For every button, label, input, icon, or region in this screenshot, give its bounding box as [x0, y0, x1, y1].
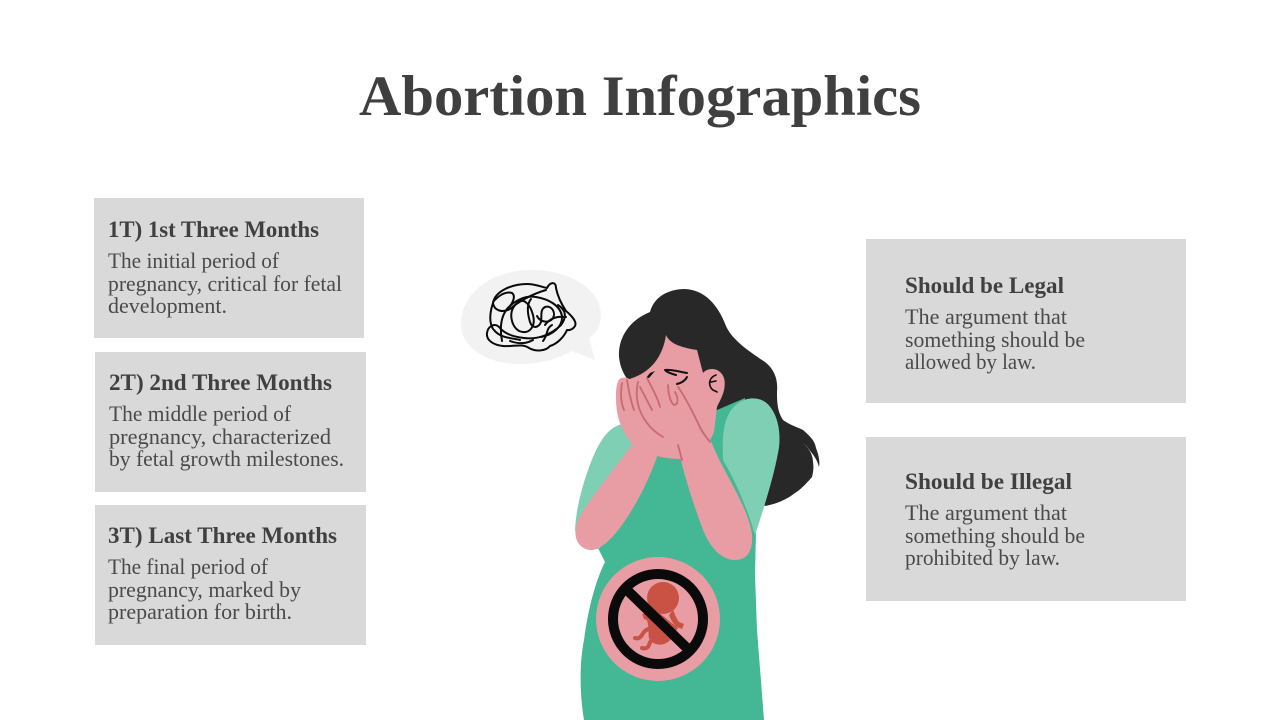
panel: should be illegal: prohibited by law.	[905, 545, 1060, 570]
closed eyes	[665, 370, 687, 384]
panel: last three months	[95, 505, 366, 645]
right sleeve	[723, 398, 780, 535]
left sleeve	[575, 424, 652, 549]
panel: should be illegal: something should be	[905, 523, 1085, 548]
panel: 1st three months: The initial period of	[108, 248, 280, 273]
face	[625, 335, 725, 459]
hair	[619, 289, 819, 506]
panel: should be legal: allowed by law.	[905, 349, 1036, 374]
panel: 2nd three months: pregnancy, characterized	[109, 424, 331, 449]
hands	[616, 377, 711, 455]
panel: 2nd three months: The middle period of	[109, 401, 292, 426]
finger creases	[621, 378, 710, 460]
panel: should be illegal: Should be Illegal	[905, 469, 1072, 494]
panel: should be legal	[866, 239, 1186, 403]
panel: last three months: preparation for birth.	[108, 599, 292, 624]
panel: should be legal: The argument that	[905, 304, 1067, 329]
panel: 1st three months: pregnancy, critical for fetal	[108, 271, 342, 296]
panel: should be legal: Should be Legal	[905, 273, 1064, 298]
panel: last three months: pregnancy, marked by	[108, 577, 301, 602]
panel: should be illegal	[866, 437, 1186, 601]
panel: should be illegal: The argument that	[905, 500, 1067, 525]
illustration: crying pregnant woman	[575, 289, 819, 720]
panel: 2nd three months: by fetal growth milestones.	[109, 446, 344, 471]
fetus	[635, 582, 684, 648]
panel: 1st three months: 1T) 1st Three Months	[108, 217, 319, 242]
left arm	[575, 446, 659, 550]
dress	[581, 398, 764, 720]
panel: should be legal: something should be	[905, 327, 1085, 352]
panel: last three months: The final period of	[108, 554, 269, 579]
ear detail	[710, 375, 717, 392]
panel: 1st three months: development.	[108, 293, 227, 318]
panel: last three months: 3T) Last Three Months	[108, 523, 337, 548]
right arm	[678, 436, 752, 560]
title: Abortion Infographics	[359, 65, 921, 128]
panel: 1st three months	[94, 198, 364, 338]
icon: no-fetus prohibition sign	[596, 557, 720, 681]
panel: 2nd three months	[95, 352, 366, 492]
icon: thought bubble with tangled scribble	[461, 270, 601, 364]
panel: 2nd three months: 2T) 2nd Three Months	[109, 370, 332, 395]
